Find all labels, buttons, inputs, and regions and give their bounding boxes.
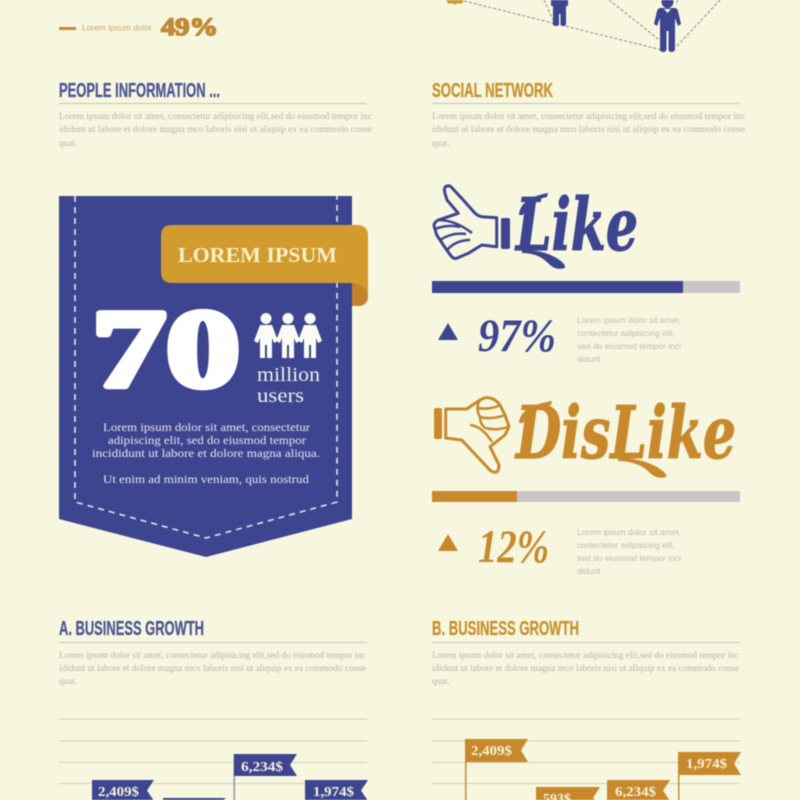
flag: 2,409 <box>92 780 154 800</box>
text block: B: quat. <box>432 676 450 686</box>
text block: B <box>432 650 739 686</box>
icon: triangle <box>438 534 458 551</box>
icon: person centre <box>551 0 568 26</box>
text block: like: contectetur adipisicing elit, <box>577 328 675 338</box>
text block: people information: ididunt ut labore et dolore magna mco laboris nisi ut aliquip ex ea commodo conse <box>59 124 372 134</box>
label: million users <box>257 364 320 407</box>
text block: people information: quat. <box>59 138 77 148</box>
text block: A: Lorem ipsum dolor sit amet, consectetur adipisicing elit,sed do eiusmod tempor inc <box>59 650 366 660</box>
chart: B business growth <box>432 718 741 800</box>
text block: like: sed do eiusmod tempor inci <box>577 341 681 351</box>
flag: 6,234: 6,234$ <box>615 785 656 800</box>
legend row: 49% <box>59 14 218 41</box>
text block: social network: ididunt ut labore et dolore magna mco laboris nisi ut aliquip ex ea commodo conse <box>432 124 745 134</box>
label: million users: users <box>257 385 304 407</box>
text block: dislike: didunt <box>577 566 601 576</box>
heading: A business growth: A. BUSINESS GROWTH <box>59 618 204 640</box>
text block: people information <box>59 111 372 148</box>
flag: 2,409: 2,409$ <box>471 744 512 759</box>
flag: 2,409: 2,409$ <box>98 785 139 800</box>
stat: 12%: 12% <box>478 521 549 573</box>
icon: triangle up <box>438 323 458 340</box>
flag: 6,234 <box>234 754 297 800</box>
icon: thumbs down <box>434 398 509 472</box>
panel: 70 million users <box>59 196 368 557</box>
ribbon: lorem ipsum: LOREM IPSUM <box>178 243 337 267</box>
flag: 2,409 <box>465 739 528 800</box>
text block: A <box>59 650 366 686</box>
heading: social network: SOCIAL NETWORK <box>432 80 553 102</box>
text block: dislike <box>577 527 681 576</box>
panel text: Lorem ipsum dolor sit amet, consectetur <box>103 422 310 434</box>
flag: 1,974 <box>305 780 368 800</box>
text block: A: quat. <box>59 676 77 686</box>
heading: B business growth: B. BUSINESS GROWTH <box>432 618 579 640</box>
text block: like: didunt <box>577 354 601 364</box>
text block: social network: quat. <box>432 138 450 148</box>
flag: 1,974: 1,974$ <box>313 785 354 800</box>
word: Like: Like <box>515 182 638 267</box>
flag: 6,234: 6,234$ <box>241 760 283 775</box>
text block: dislike: contectetur adipisicing elit, <box>577 540 675 550</box>
text block: social network <box>432 111 745 148</box>
like block <box>432 182 740 364</box>
flag: 1,974: 1,974$ <box>686 757 727 772</box>
text block: dislike: Lorem ipsum dolor sit amet, <box>577 527 681 537</box>
big number 70: 70 <box>92 288 240 411</box>
flag: partial <box>163 798 226 800</box>
text block: A: ididunt ut labore et dolore magna mco laboris nisi ut aliquip ex ea commodo conse <box>59 663 366 673</box>
panel text: Ut enim ad minim veniam, quis nostrud <box>103 474 309 486</box>
icon: thumbs up <box>434 186 510 258</box>
text block: B: ididunt ut labore et dolore magna mco laboris nisi ut aliquip ex ea commodo conse <box>432 663 739 673</box>
stat: 97%: 97% <box>478 310 556 362</box>
text block: people information: Lorem ipsum dolor sit amet, consectetur adipisicing elit,sed do eiusmod tempor inc <box>59 111 372 121</box>
icon: three people <box>254 313 322 358</box>
text block: like <box>577 315 681 364</box>
text block: B: Lorem ipsum dolor sit amet, consectetur adipisicing elit,sed do eiusmod tempor inc <box>432 650 739 660</box>
text block: dislike: sed do eiusmod tempor inci <box>577 553 681 563</box>
flag: 6,234 <box>607 780 670 800</box>
icon: person right <box>654 0 681 52</box>
progress bar: dislike 12 <box>432 491 740 502</box>
heading: people information: PEOPLE INFORMATION ... <box>59 80 220 102</box>
label: million users: million <box>257 364 320 386</box>
panel text: adipiscing elit, sed do eiusmod tempor <box>108 435 306 447</box>
legend row: 49%: 49% <box>161 14 218 41</box>
chart: A business growth <box>59 718 368 800</box>
ribbon: lorem ipsum <box>161 225 368 306</box>
flag: 1,974 <box>678 752 741 800</box>
panel text <box>92 422 320 486</box>
dislike block <box>432 390 740 576</box>
text block: like: Lorem ipsum dolor sit amet, <box>577 315 681 325</box>
text block: social network: Lorem ipsum dolor sit amet, consectetur adipisicing elit,sed do eiusmod tempor inc <box>432 111 745 121</box>
progress bar: like 97 <box>432 281 740 293</box>
word: Like <box>515 182 638 269</box>
icon: orange person fragment <box>447 0 463 4</box>
social network diagram <box>447 0 720 52</box>
legend row: 49%: Lorem ipsum dolor <box>82 24 152 32</box>
flag: 593 <box>536 787 600 800</box>
panel text: incididunt ut labore et dolore magna aliqua. <box>92 448 320 460</box>
